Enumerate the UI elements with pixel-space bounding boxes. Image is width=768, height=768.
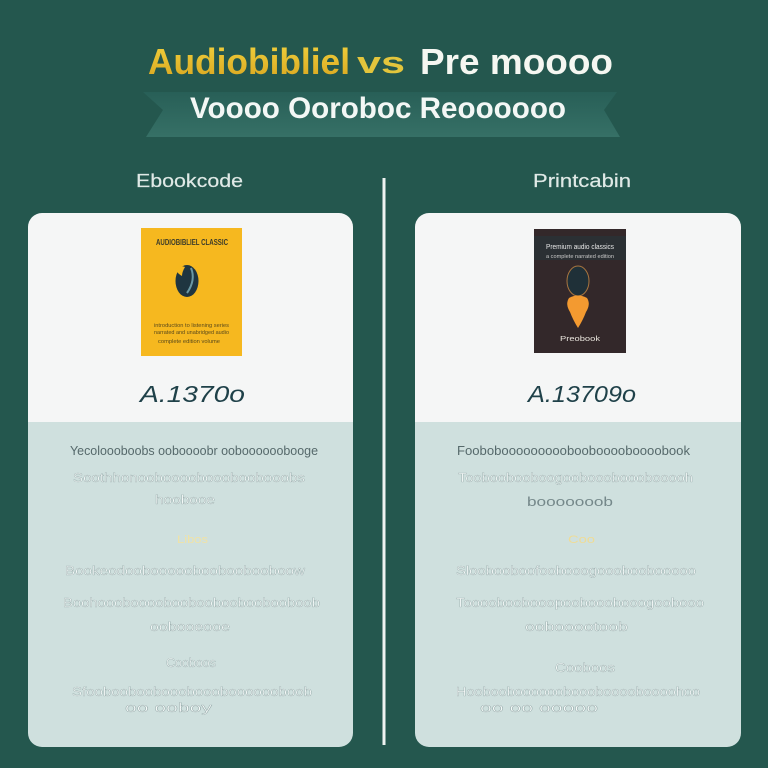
card upper section (415, 213, 741, 422)
book cover: yellow: introduction to listening series (154, 323, 229, 329)
center divider (382, 178, 386, 745)
feature text: hoobooe (155, 492, 215, 507)
panel: left (28, 213, 353, 747)
feature text (456, 443, 704, 715)
book cover: yellow: narrated and unabridged audio (154, 330, 229, 336)
feature text: Tooboobooboogoobooobooobooooh (458, 470, 693, 485)
feature text: booooooob (527, 494, 613, 509)
feature text: Sloobooboofoobooogoooboobooooo (456, 563, 696, 578)
card lower section (28, 420, 353, 747)
price: A.1370o (138, 381, 245, 407)
card lower section (415, 420, 741, 747)
title: Audiobibliel (148, 41, 350, 82)
feature text: Boohoooboooobooboobooboobooboob (63, 595, 320, 610)
feature text (63, 443, 320, 715)
feature text: Tooooboobooopoobooobooogoobooo (456, 595, 704, 610)
subtitle ribbon (143, 92, 620, 137)
book cover: dark: Premium audio classics (546, 244, 614, 251)
price: A.13709o (526, 381, 636, 407)
panel: right (415, 213, 741, 747)
feature text: Sfoobooboobooobooobooooooboob (72, 684, 312, 699)
feature text: Soothhonoobooooboooboobooobs (73, 470, 306, 485)
subtitle ribbon: Voooo Ooroboc Reoooooo (190, 92, 566, 125)
title: vs (357, 45, 405, 80)
book cover: yellow: AUDIOBIBLIEL CLASSIC (156, 238, 228, 247)
feature text: Yecoloooboobs ooboooobr ooboooooobooge (70, 443, 318, 458)
feature text: oo oo ooooo (480, 700, 598, 715)
feature text: Cooboos (555, 660, 616, 675)
feature text: Cooboos (166, 655, 216, 670)
feature text: oobooeooe (150, 619, 230, 634)
column heading: right: Printcabin (533, 171, 631, 191)
feature text: Fooboboooooooooboobooooboooobook (457, 443, 691, 458)
book cover: dark: a complete narrated edition (546, 254, 614, 260)
column heading: left: Ebookcode (136, 171, 243, 191)
feature text: Coo (568, 534, 595, 546)
feature text: oobooootoob (525, 619, 628, 634)
card upper section (28, 213, 353, 422)
title (148, 41, 613, 82)
feature text: Hoobooboooooobooobooooboooohoo (456, 684, 700, 699)
book cover: yellow: complete edition volume (158, 339, 220, 345)
feature text: oo ooboy (125, 700, 213, 715)
book cover: yellow (141, 228, 242, 356)
title: Pre moooo (420, 41, 613, 82)
book cover: dark: Preobook (560, 336, 601, 343)
feature text: Bookeodoobooooobooboobooboow (65, 563, 306, 578)
book cover: dark (534, 229, 626, 353)
feature text: Libos (177, 534, 209, 546)
